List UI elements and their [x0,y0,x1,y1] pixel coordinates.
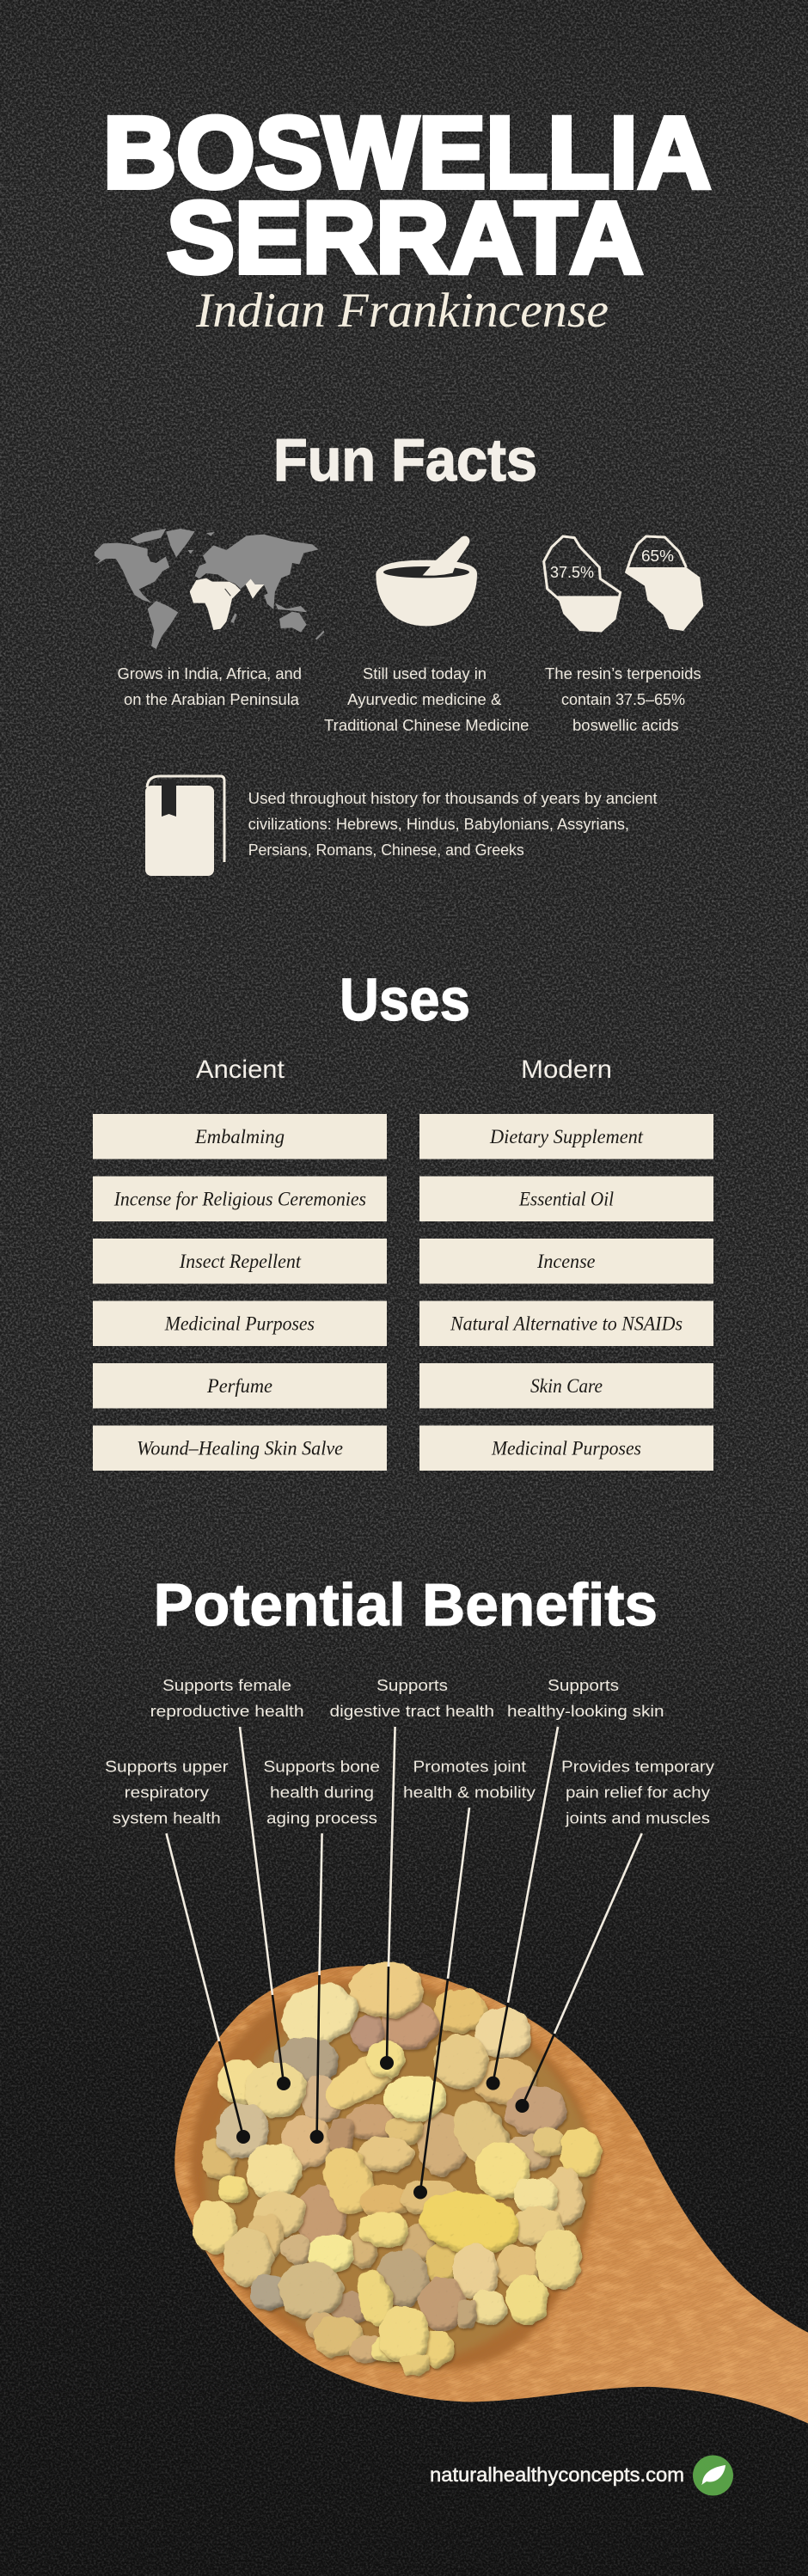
title: SERRATA [167,181,643,295]
icon: book [145,776,224,876]
heading: fun facts: Fun Facts [273,426,537,493]
label: joint health and mobility: health & mobility [403,1784,536,1802]
label: female reproductive health [150,1677,304,1720]
item: natural alternative to NSAIDs [419,1301,713,1346]
text: grows in India: Grows in India, Africa, and [117,665,302,682]
item: incense [419,1239,713,1284]
text: still used today: Traditional Chinese Medicine [324,717,529,734]
text: terpenoids: contain 37.5–65% [561,691,685,708]
text: terpenoids [545,665,701,734]
pointer: female reproductive [240,1727,291,2090]
text: terpenoids: The resin’s terpenoids [545,665,701,682]
spoon [174,1966,808,2423]
item: perfume [93,1363,387,1408]
item: incense for religious ceremonies [93,1176,387,1221]
item: incense for religious ceremonies: Incense for Religious Ceremonies [113,1188,366,1210]
item: skin care: Skin Care [530,1375,603,1397]
item: dietary supplement [419,1114,713,1159]
label: bone health: Supports bone [263,1759,380,1776]
label: digestive tract health: digestive tract health [330,1703,494,1720]
pointer: upper respiratory [167,1833,250,2144]
icon: resin 65 percent [625,536,703,631]
label: bone health [263,1759,380,1827]
text: used throughout history: civilizations: Hebrews, Hindus, Babylonians, Assyrians, [248,816,629,833]
item: medicinal purposes [419,1425,713,1471]
text: still used today: Ayurvedic medicine & [347,691,502,708]
subtitle: Indian Frankincense [195,284,609,338]
label: temporary pain relief [561,1759,714,1827]
item: embalming [93,1114,387,1159]
label: digestive tract health [330,1677,494,1720]
label: upper respiratory system health: Supports upper [105,1759,229,1776]
text: used throughout history [248,790,658,859]
title [103,96,711,295]
item: dietary supplement: Dietary Supplement [489,1126,644,1147]
item: wound-healing skin salve: Wound–Healing Skin Salve [137,1437,343,1459]
label: temporary pain relief: pain relief for achy [566,1784,710,1802]
label: upper respiratory system health: system health [113,1810,221,1827]
column heading: ancient: Ancient [196,1055,285,1084]
label: temporary pain relief: Provides temporary [561,1759,714,1776]
pointer: joint health [413,1808,469,2199]
icon: resin 37.5 percent: 37.5% [550,564,594,581]
text: used throughout history: Used throughout history for thousands of years by ancient [248,790,658,807]
pointer: bone health [310,1833,324,2144]
item: incense: Incense [536,1251,595,1272]
item: medicinal purposes: Medicinal Purposes [164,1313,315,1334]
label: temporary pain relief: joints and muscles [565,1810,710,1827]
pointer: pain relief [516,1833,642,2113]
label: upper respiratory system health: respiratory [125,1784,209,1802]
item: embalming: Embalming [194,1126,285,1147]
icon: resin 37.5 percent [544,536,621,631]
label: bone health: aging process [266,1810,377,1827]
text: terpenoids: boswellic acids [572,717,679,734]
wooden spoon with resin [174,1965,808,2423]
title: BOSWELLIA [103,96,711,210]
text: grows in India: on the Arabian Peninsula [124,691,300,708]
pointer: digestive tract [380,1727,395,2070]
text: grows in India [117,665,302,708]
label: digestive tract health: Supports [376,1677,448,1694]
footer website: naturalhealthyconcepts.com [430,2463,684,2486]
heading: uses: Uses [340,966,470,1033]
label: joint health and mobility: Promotes joint [413,1759,526,1776]
pointer: healthy skin [487,1727,558,2090]
panel: modern uses [419,1055,713,1471]
resin pieces [195,1965,598,2374]
item: perfume: Perfume [206,1375,272,1397]
icon: world map [95,529,324,649]
item: essential oil [419,1176,713,1221]
item: essential oil: Essential Oil [518,1188,614,1210]
label: healthy-looking skin [507,1677,664,1720]
item: wound-healing skin salve [93,1425,387,1471]
item: medicinal purposes [93,1301,387,1346]
column heading: modern: Modern [521,1055,612,1084]
label: healthy-looking skin: healthy-looking skin [507,1703,664,1720]
heading: potential benefits: Potential Benefits [154,1571,658,1638]
item: skin care [419,1363,713,1408]
item: insect repellent: Insect Repellent [179,1251,302,1272]
label: female reproductive health: Supports female [162,1677,291,1694]
label: bone health: health during [270,1784,374,1802]
icon: green leaf logo [693,2455,733,2496]
text: still used today: Still used today in [363,665,487,682]
text: used throughout history: Persians, Romans, Chinese, and Greeks [248,841,524,859]
item: medicinal purposes: Medicinal Purposes [491,1437,641,1459]
label: female reproductive health: reproductive health [150,1703,304,1720]
item: insect repellent [93,1239,387,1284]
panel: ancient uses [93,1055,387,1471]
label: healthy-looking skin: Supports [548,1677,619,1694]
text: still used today [324,665,529,734]
icon: resin 65 percent: 65% [641,548,674,565]
item: natural alternative to NSAIDs: Natural Alternative to NSAIDs [450,1313,683,1334]
icon: mortar and pestle [376,536,477,626]
label: upper respiratory system health [105,1759,229,1827]
label: joint health and mobility [403,1759,536,1802]
